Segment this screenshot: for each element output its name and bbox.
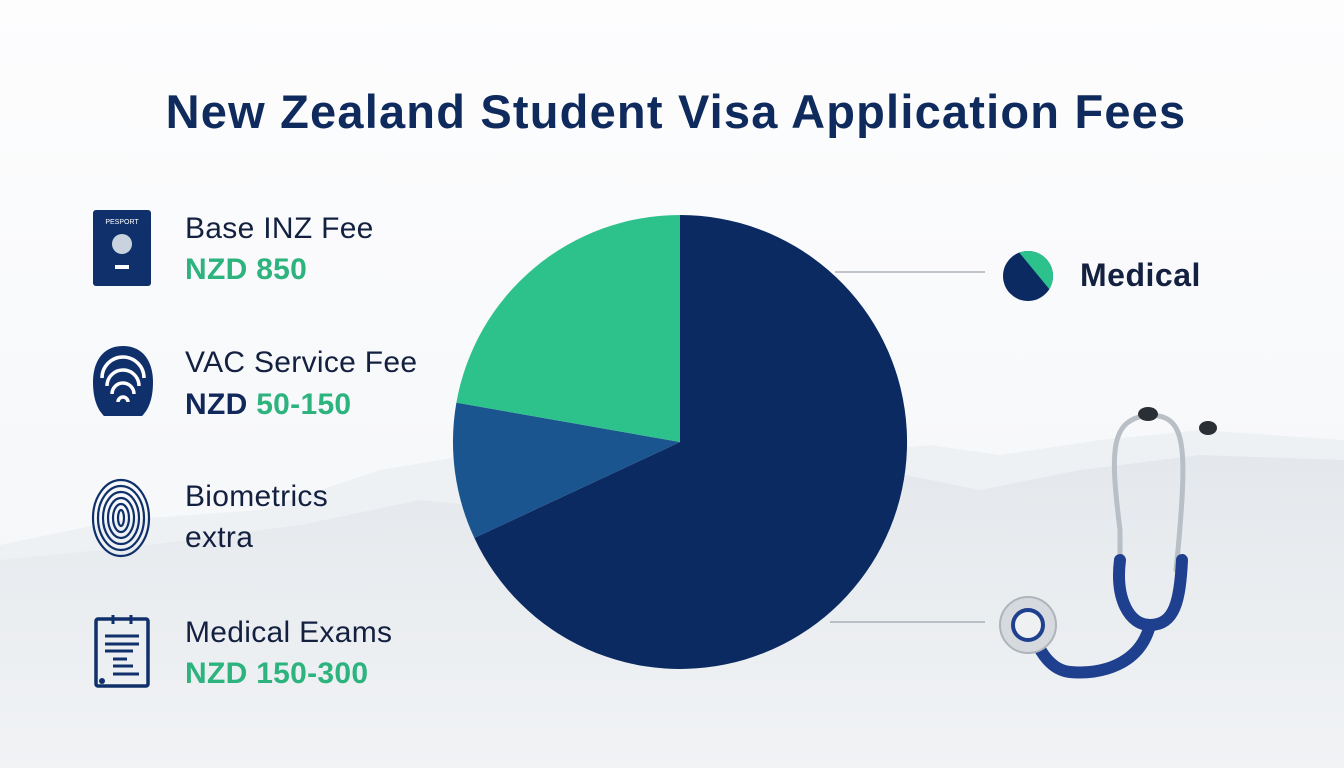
item: base fee: Base INZ Fee bbox=[185, 212, 374, 245]
item: biometrics: Biometrics bbox=[185, 480, 328, 513]
icon: fingerprint badge bbox=[93, 346, 153, 416]
item: VAC: VAC Service Fee bbox=[185, 346, 417, 379]
item: base fee: NZD 850 bbox=[185, 253, 307, 286]
item: biometrics bbox=[92, 478, 328, 558]
legend: medical bbox=[1003, 251, 1201, 301]
title: New Zealand Student Visa Application Fees bbox=[166, 85, 1186, 138]
item: medical exams: Medical Exams bbox=[185, 616, 392, 649]
item: base fee bbox=[93, 210, 374, 286]
item: VAC bbox=[93, 346, 417, 421]
icon: passport: PESPORT bbox=[105, 219, 139, 226]
item: biometrics: extra bbox=[185, 521, 253, 554]
icon: stethoscope bbox=[999, 407, 1217, 678]
item: VAC: NZD 50-150 bbox=[185, 388, 351, 421]
item: medical exams: NZD 150-300 bbox=[185, 657, 368, 690]
icon: fingerprint bbox=[92, 478, 150, 558]
icon: clipboard bbox=[94, 615, 150, 688]
connector lines bbox=[830, 271, 985, 623]
pie chart bbox=[452, 215, 908, 669]
legend: medical: Medical bbox=[1080, 257, 1201, 293]
item: medical exams bbox=[94, 615, 392, 690]
icon: passport bbox=[93, 210, 151, 286]
